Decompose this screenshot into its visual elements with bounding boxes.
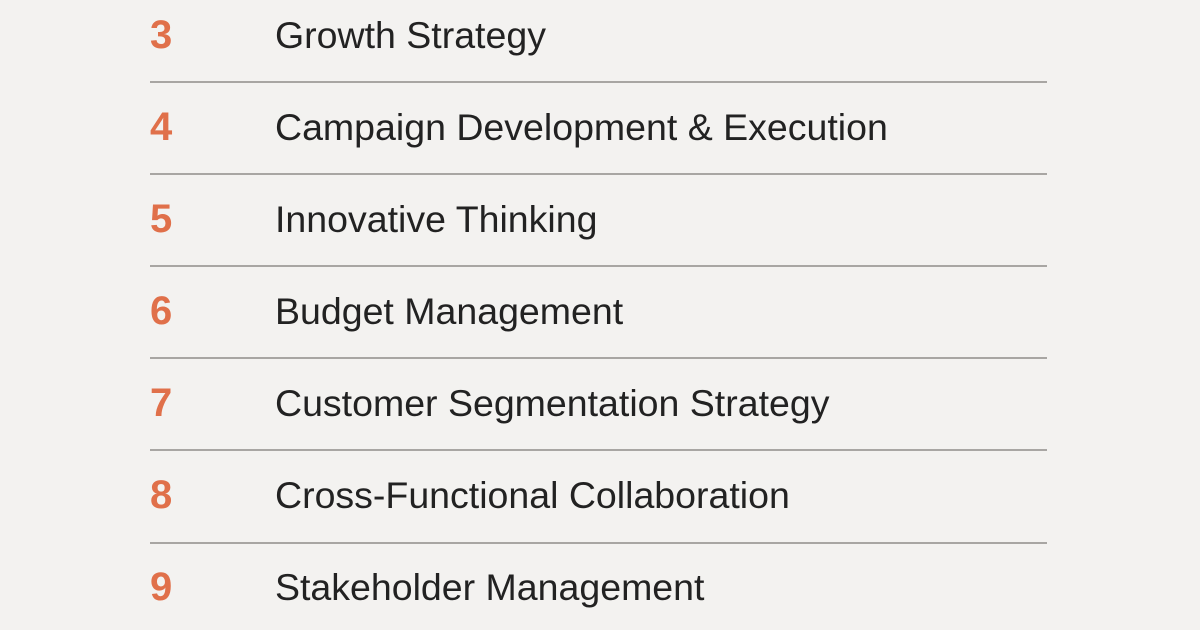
list row 5 xyxy=(150,197,597,241)
list row 3 xyxy=(150,13,546,57)
list row 8: Cross-Functional Collaboration xyxy=(275,474,790,516)
list row 3: Growth Strategy xyxy=(275,14,546,56)
list row 9: 9 xyxy=(150,565,172,609)
list row 6: Budget Management xyxy=(275,290,623,332)
list row 4: 4 xyxy=(150,105,172,149)
list row 4: Campaign Development & Execution xyxy=(275,106,888,148)
list row 3: 3 xyxy=(150,13,172,57)
list row 8: 8 xyxy=(150,473,172,517)
list row 7: 7 xyxy=(150,381,172,425)
list row 5: Innovative Thinking xyxy=(275,198,597,240)
list row 6: 6 xyxy=(150,289,172,333)
list row 5: 5 xyxy=(150,197,172,241)
list row 7: Customer Segmentation Strategy xyxy=(275,382,829,424)
list row 9: Stakeholder Management xyxy=(275,566,704,608)
